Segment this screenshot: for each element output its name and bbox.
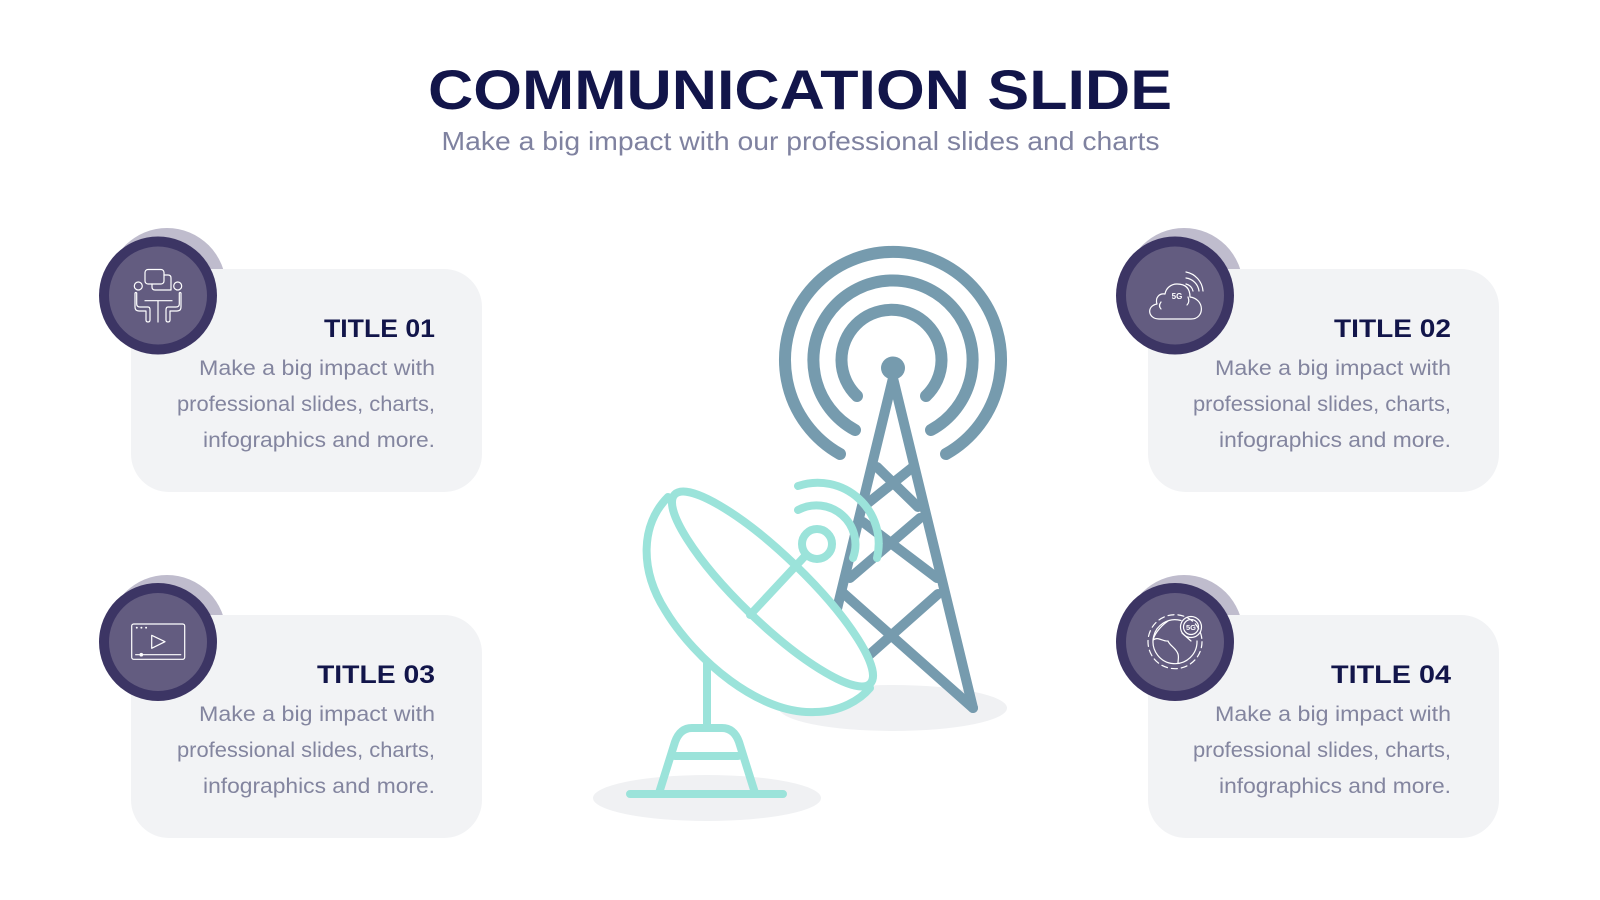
heading: TITLE 02 <box>1334 315 1451 343</box>
illustration: radio tower <box>785 252 1001 708</box>
icon: 5G cloud: 5G <box>1172 292 1182 301</box>
title: COMMUNICATION SLIDE <box>428 58 1172 121</box>
text block: infographics and more. <box>1219 775 1451 798</box>
text block <box>1193 357 1451 452</box>
panel: title 03 <box>99 575 482 838</box>
heading: TITLE 01 <box>324 315 435 343</box>
text block: Make a big impact with <box>199 703 435 726</box>
subtitle: Make a big impact with our professional slides and charts <box>442 126 1160 156</box>
text block: Make a big impact with <box>1215 357 1451 380</box>
panel: title 02 <box>1116 228 1499 492</box>
text block: infographics and more. <box>203 775 435 798</box>
icon: meeting at table <box>134 270 182 322</box>
illustration: satellite dish <box>630 471 893 794</box>
icon: 5G globe <box>1148 615 1202 669</box>
icon: video player <box>132 624 185 659</box>
icon: 5G globe: 5G <box>1186 623 1196 632</box>
icon: 5G cloud <box>1150 272 1203 319</box>
text block: Make a big impact with <box>1215 703 1451 726</box>
ground shadow: tower <box>779 685 1007 731</box>
text block <box>177 357 435 452</box>
text block <box>1193 703 1451 798</box>
text block: Make a big impact with <box>199 357 435 380</box>
heading: TITLE 04 <box>1331 661 1451 689</box>
text block: professional slides, charts, <box>1193 739 1451 762</box>
text block: infographics and more. <box>203 429 435 452</box>
heading: TITLE 03 <box>317 661 435 689</box>
text block: infographics and more. <box>1219 429 1451 452</box>
panel: title 01 <box>99 228 482 492</box>
text block: professional slides, charts, <box>177 393 435 416</box>
panel: title 04 <box>1116 575 1499 838</box>
text block: professional slides, charts, <box>1193 393 1451 416</box>
text block <box>177 703 435 798</box>
ground shadow: dish <box>593 775 821 821</box>
text block: professional slides, charts, <box>177 739 435 762</box>
